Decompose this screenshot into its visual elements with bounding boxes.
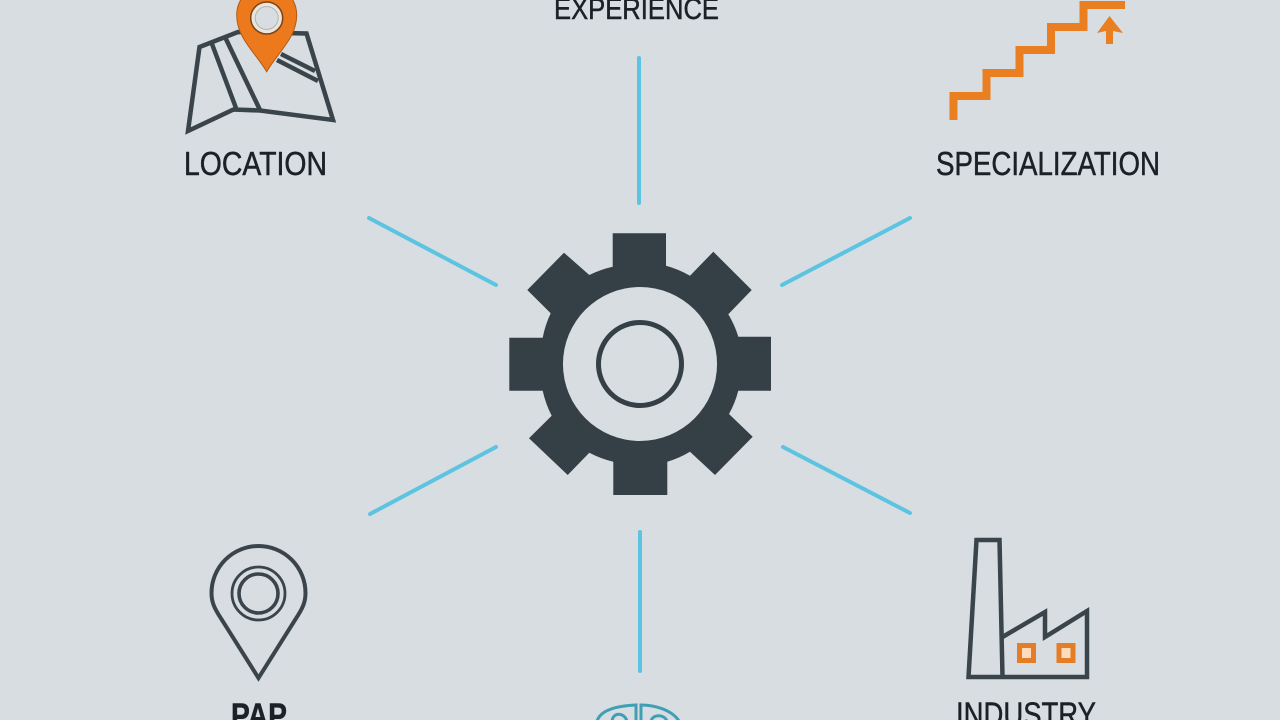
icon: up arrow (1097, 16, 1123, 44)
panel: industry (956, 540, 1096, 720)
icon: orange stairs (954, 5, 1125, 120)
label: specialization: SPECIALIZATION (936, 145, 1160, 182)
icon: orange location pin (237, 0, 297, 72)
panel: location (184, 0, 333, 182)
panel: specialization (936, 5, 1160, 182)
label: location: LOCATION (184, 145, 327, 182)
icon: brain, cropped at bottom edge (597, 705, 679, 720)
central gear icon (509, 233, 771, 495)
icon: outline map pin (212, 546, 306, 678)
icon: factory (968, 540, 1087, 677)
connector spokes (369, 58, 910, 671)
panel: pap (212, 546, 306, 720)
icon: folded map (188, 32, 333, 131)
